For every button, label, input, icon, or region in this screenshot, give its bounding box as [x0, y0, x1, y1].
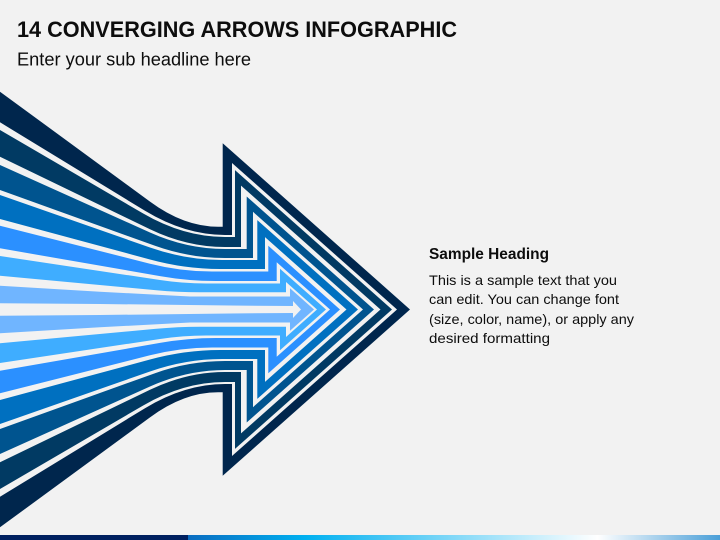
subtitle: Enter your sub headline here [17, 50, 251, 70]
body text: This is a sample text that you [429, 272, 617, 288]
footer bar [0, 535, 720, 540]
arrow band 3 [0, 165, 374, 454]
title: 14 CONVERGING ARROWS INFOGRAPHIC [17, 17, 457, 42]
body text: (size, color, name), or apply any [429, 311, 634, 327]
body text [429, 272, 634, 346]
arrow band 5 [0, 226, 340, 393]
arrow band 6 [0, 256, 326, 363]
body text: can edit. You can change font [429, 291, 619, 307]
body text: desired formatting [429, 330, 550, 346]
converging arrows graphic [0, 92, 410, 527]
arrow band 7 [0, 286, 314, 333]
arrow band 2 [0, 130, 392, 489]
text block: sample heading and body [429, 246, 634, 346]
arrow band 1 [0, 92, 410, 527]
arrow band 4 [0, 195, 358, 424]
heading: Sample Heading [429, 246, 549, 263]
